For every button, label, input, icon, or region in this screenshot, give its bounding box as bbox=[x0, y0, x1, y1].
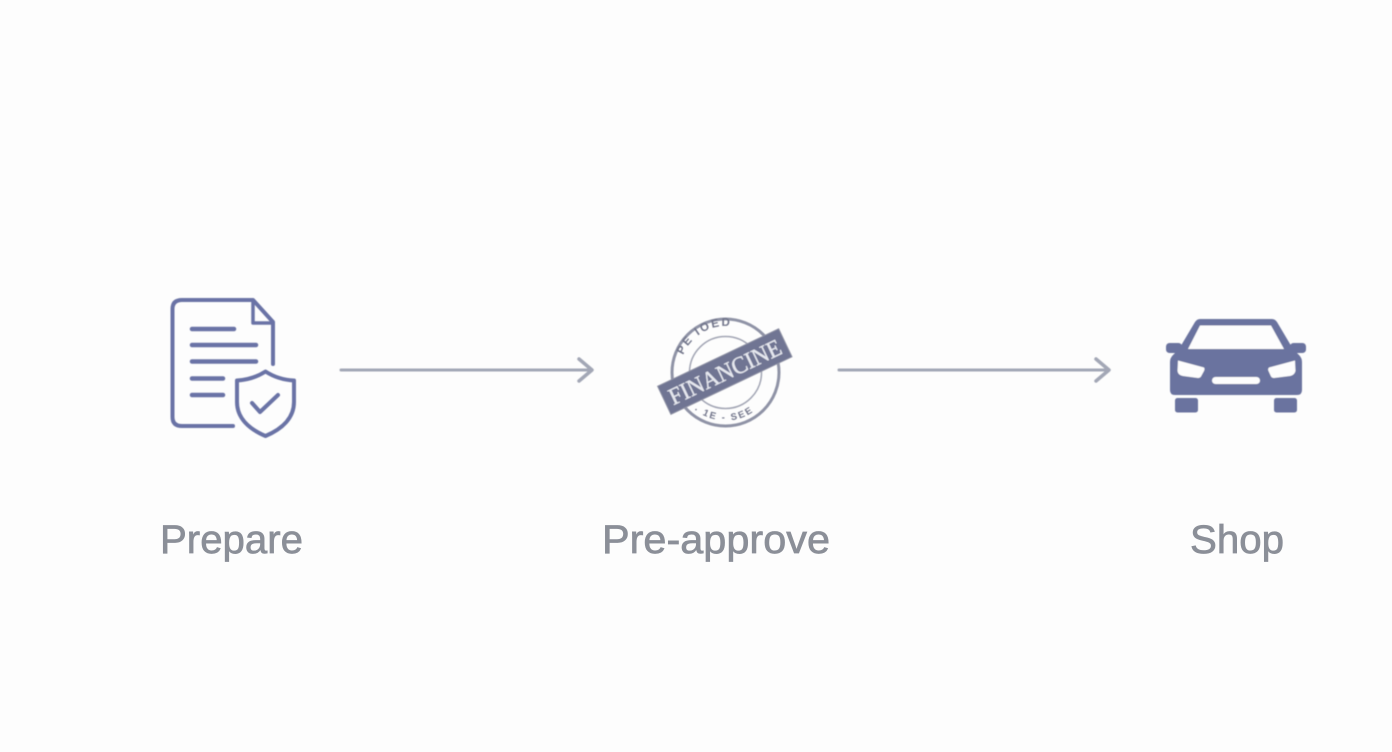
icon: financing stamp: . 1E - SEE bbox=[694, 406, 753, 421]
label: Prepare: Prepare bbox=[160, 518, 303, 562]
arrow: prepare to pre-approve bbox=[341, 359, 592, 381]
stamp banner: FINANCINE bbox=[665, 335, 786, 411]
icon: document with security shield bbox=[172, 300, 294, 436]
label: Shop: Shop bbox=[1190, 518, 1284, 562]
icon: financing stamp: PE IOED bbox=[676, 318, 730, 355]
icon: car front view bbox=[1166, 319, 1306, 412]
icon: financing stamp bbox=[656, 316, 793, 428]
arrow: pre-approve to shop bbox=[839, 359, 1109, 381]
label: Pre-approve: Pre-approve bbox=[602, 518, 830, 562]
